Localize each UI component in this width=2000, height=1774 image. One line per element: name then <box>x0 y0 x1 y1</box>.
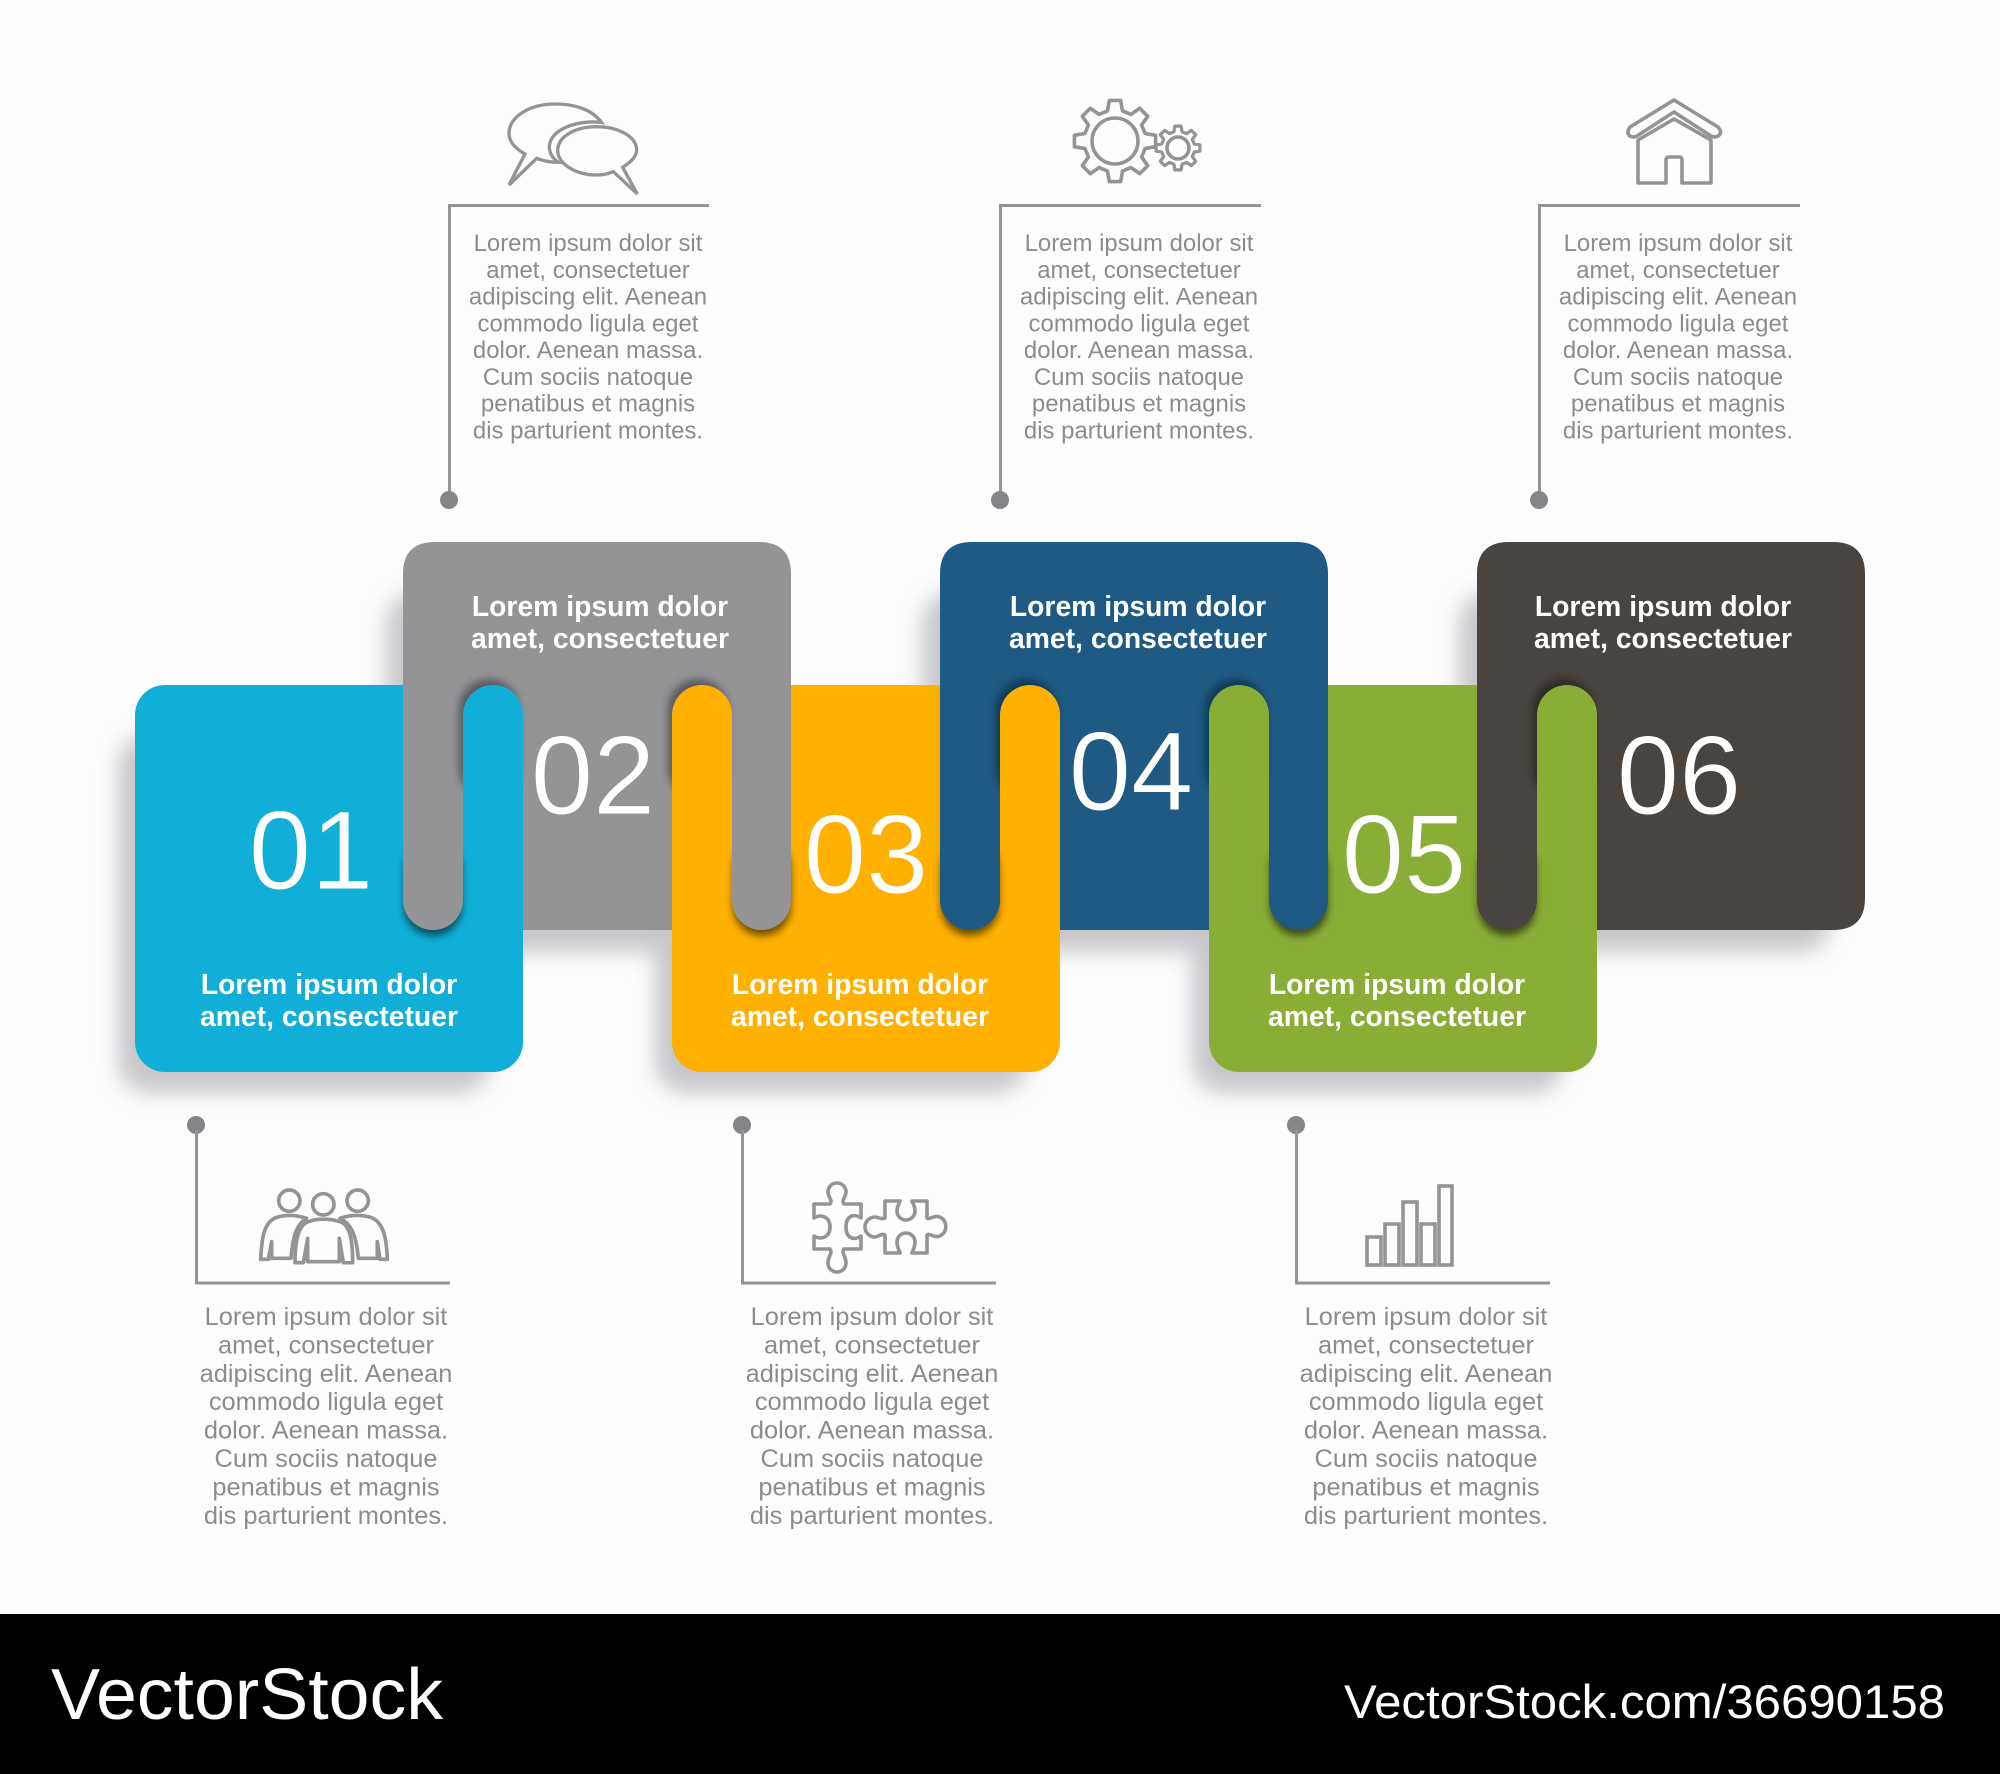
callout text: adipiscing elit. Aenean <box>200 1360 452 1388</box>
callout text: amet, consectetuer <box>218 1331 435 1359</box>
callout text: commodo ligula eget <box>1309 1388 1543 1416</box>
footer logo text: VectorStock <box>51 1655 444 1735</box>
heading 02: amet, consectetuer <box>471 622 729 654</box>
callout text: dis parturient montes. <box>750 1502 994 1530</box>
callout text: Lorem ipsum dolor sit <box>1564 230 1792 257</box>
callout bottom 03 <box>733 1116 998 1530</box>
callout text: penatibus et magnis <box>212 1473 440 1501</box>
icon: people <box>261 1190 387 1263</box>
heading 01: amet, consectetuer <box>200 1000 458 1032</box>
heading 06: amet, consectetuer <box>1534 622 1792 654</box>
number 01: 01 <box>249 788 373 913</box>
icon: gears <box>1074 100 1200 182</box>
callout text: amet, consectetuer <box>486 257 690 284</box>
callout text: amet, consectetuer <box>1037 257 1241 284</box>
callout text: Lorem ipsum dolor sit <box>1025 230 1253 257</box>
footer bar <box>0 1614 2000 1774</box>
callout text: dis parturient montes. <box>1304 1502 1548 1530</box>
tile 05 green <box>1209 685 1597 1072</box>
connector dot <box>187 1116 205 1134</box>
tile 06 charcoal with finger <box>1477 542 1865 936</box>
callout text: Cum sociis natoque <box>483 364 693 391</box>
callout top 04 <box>991 100 1261 509</box>
footer url text: VectorStock.com/36690158 <box>1344 1675 1945 1728</box>
callout text: dolor. Aenean massa. <box>1563 337 1793 364</box>
callout text: Lorem ipsum dolor sit <box>751 1303 993 1331</box>
heading 03: amet, consectetuer <box>731 1000 989 1032</box>
callout frame line <box>1000 206 1261 495</box>
heading 04: Lorem ipsum dolor <box>1010 590 1266 622</box>
callout text: Lorem ipsum dolor sit <box>205 1303 447 1331</box>
callout text: penatibus et magnis <box>758 1473 986 1501</box>
callout text: Cum sociis natoque <box>214 1445 438 1473</box>
number 02: 02 <box>531 713 655 838</box>
callout top 06 <box>1530 100 1800 509</box>
callout text: dolor. Aenean massa. <box>204 1417 448 1445</box>
callout text: dis parturient montes. <box>204 1502 448 1530</box>
number 04: 04 <box>1069 709 1193 834</box>
callout text: penatibus et magnis <box>481 390 695 418</box>
callout text: Lorem ipsum dolor sit <box>1305 1303 1547 1331</box>
callout bottom 05 <box>1287 1116 1552 1530</box>
callout frame line <box>196 1130 450 1283</box>
callout text: adipiscing elit. Aenean <box>1559 284 1797 310</box>
callout text: dolor. Aenean massa. <box>1024 337 1254 364</box>
callout text: amet, consectetuer <box>1318 1331 1535 1359</box>
connector dot <box>1287 1116 1305 1134</box>
callout text: commodo ligula eget <box>209 1388 443 1416</box>
icon: house <box>1628 100 1720 183</box>
tile 04 dark blue with fingers <box>940 542 1328 936</box>
callout text: dis parturient montes. <box>1024 417 1254 444</box>
number 05: 05 <box>1342 792 1466 917</box>
callout text: commodo ligula eget <box>755 1388 989 1416</box>
callout frame line <box>450 206 709 495</box>
number 06: 06 <box>1617 713 1741 838</box>
connector dot <box>1530 491 1548 509</box>
callout text: penatibus et magnis <box>1032 390 1246 418</box>
heading 01: Lorem ipsum dolor <box>201 968 457 1000</box>
callout text: Lorem ipsum dolor sit <box>474 230 702 257</box>
tile 01 blue <box>135 685 523 1072</box>
callout text: amet, consectetuer <box>1576 257 1780 284</box>
heading 06: Lorem ipsum dolor <box>1535 590 1791 622</box>
callout frame line <box>742 1130 996 1283</box>
tile 02 grey with fingers <box>403 542 791 936</box>
drop shadows behind tiles <box>118 592 1831 1093</box>
connector dot <box>991 491 1009 509</box>
heading 02: Lorem ipsum dolor <box>472 590 728 622</box>
callout top 02 <box>440 104 709 509</box>
callout text: dolor. Aenean massa. <box>1304 1417 1548 1445</box>
icon: puzzle pieces <box>814 1183 946 1272</box>
callout text: Cum sociis natoque <box>1314 1445 1538 1473</box>
heading 03: Lorem ipsum dolor <box>732 968 988 1000</box>
callout text: adipiscing elit. Aenean <box>746 1360 998 1388</box>
callout frame line <box>1540 206 1800 495</box>
callout text: dolor. Aenean massa. <box>473 337 703 364</box>
icon: speech bubbles <box>509 104 637 194</box>
connector dot <box>440 491 458 509</box>
callout text: adipiscing elit. Aenean <box>1020 284 1258 310</box>
icon: bar chart <box>1367 1186 1452 1265</box>
callout text: adipiscing elit. Aenean <box>1300 1360 1552 1388</box>
callout text: penatibus et magnis <box>1312 1473 1540 1501</box>
callout text: Cum sociis natoque <box>760 1445 984 1473</box>
callout text: dis parturient montes. <box>1563 417 1793 444</box>
callout text: commodo ligula eget <box>1568 310 1789 337</box>
callout frame line <box>1296 1130 1550 1283</box>
callout text: adipiscing elit. Aenean <box>469 284 707 310</box>
callout text: dolor. Aenean massa. <box>750 1417 994 1445</box>
callout bottom 01 <box>187 1116 452 1530</box>
heading 04: amet, consectetuer <box>1009 622 1267 654</box>
callout text: Cum sociis natoque <box>1034 364 1244 391</box>
callout text: commodo ligula eget <box>1029 310 1250 337</box>
callout text: dis parturient montes. <box>473 417 703 444</box>
connector dot <box>733 1116 751 1134</box>
callout text: Cum sociis natoque <box>1573 364 1783 391</box>
tile 03 orange <box>672 685 1060 1072</box>
callout text: amet, consectetuer <box>764 1331 981 1359</box>
callout text: penatibus et magnis <box>1571 390 1785 418</box>
number 03: 03 <box>804 792 928 917</box>
heading 05: Lorem ipsum dolor <box>1269 968 1525 1000</box>
heading 05: amet, consectetuer <box>1268 1000 1526 1032</box>
callout text: commodo ligula eget <box>478 310 699 337</box>
